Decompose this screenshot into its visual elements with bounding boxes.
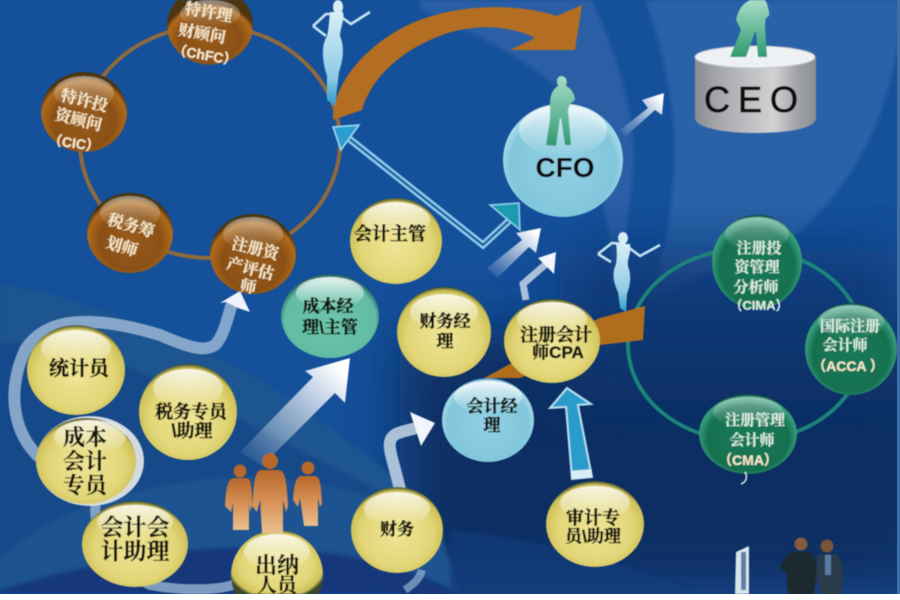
sphere: CIC: （CIC） — [47, 131, 101, 155]
sphere: ACCA: 会计师 — [822, 336, 868, 354]
sphere: tax planner — [87, 193, 173, 273]
sphere: cost manager: 理\主管 — [302, 317, 358, 337]
arrow: brown band through CPA to green circle — [482, 306, 645, 378]
sphere: CIMA: 资管理 — [734, 258, 780, 276]
sphere: accounting manager — [442, 378, 534, 462]
icon: CFO figure — [546, 76, 575, 146]
sphere: ChFC: 财顾问 — [177, 20, 227, 47]
sphere: ChFC: 特许理 — [183, 0, 234, 26]
sphere: tax planner: 税务筹 — [105, 210, 157, 241]
illustration: businessmen and tower — [735, 538, 843, 594]
sphere: finance clerk — [351, 487, 443, 573]
sphere: ACCA: （ACCA ） — [812, 358, 884, 374]
sphere: CFO — [503, 76, 623, 217]
arrow: large brown curved arrow to CEO track — [333, 5, 582, 120]
sphere: CMA: 注册管理 — [725, 411, 785, 429]
sphere: CIMA: 分析师 — [733, 278, 779, 296]
sphere: cost accountant: 成本 — [63, 425, 107, 450]
sphere: accounting assistant: 会计会 — [100, 514, 170, 540]
sphere: asset appraiser: 注册资 — [230, 234, 283, 264]
sphere: asset appraiser: 师 — [239, 277, 258, 297]
sphere: cost accountant: 会计 — [63, 449, 107, 474]
arrow: white bent arrow finance to accounting manager — [390, 412, 435, 590]
sphere: finance clerk: 财务 — [380, 519, 414, 539]
sphere: CIC: 特许投 — [59, 86, 110, 116]
sphere: ChFC: （ChFC） — [171, 41, 239, 69]
sphere: finance manager — [397, 287, 491, 377]
sphere: CMA: （CMA） — [718, 452, 778, 468]
sphere: cost manager: 成本经 — [302, 297, 354, 316]
sphere: CIMA: （CIMA） — [729, 298, 789, 313]
sphere: audit assistant: 员\助理 — [565, 527, 621, 546]
sphere: ACCA: 国际注册 — [820, 317, 880, 335]
sphere: finance manager: 理 — [436, 332, 454, 351]
sphere: tax specialist — [139, 364, 237, 460]
sphere: CPA: 注册会计 — [520, 324, 592, 345]
sphere: accounting manager: 会计经 — [466, 396, 518, 416]
sphere: accounting supervisor: 会计主管 — [354, 223, 426, 244]
sphere: audit assistant: 审计专 — [566, 507, 620, 528]
ring: green certification circle — [628, 249, 864, 441]
arrow: white bent arrow CPA to CFO — [523, 252, 556, 300]
arrow: curve behind accounting assistant — [95, 500, 240, 589]
sphere: accounting assistant — [82, 501, 188, 587]
sphere: tax specialist: 税务专员 — [155, 401, 230, 422]
ring: brown certification circle — [80, 26, 340, 258]
sphere: cashier: 出纳 — [255, 553, 299, 578]
sphere: accounting manager: 理 — [484, 416, 500, 435]
arrow: white curved arrow from cost accountant to appraiser — [14, 291, 250, 458]
icon: three people — [225, 453, 322, 533]
icon: female silhouette top — [313, 0, 370, 106]
sphere: CIC: 资顾问 — [53, 105, 104, 135]
sphere: asset appraiser — [210, 214, 296, 297]
arrow: white arrow CFO to CEO — [620, 93, 664, 137]
sphere: CMA — [699, 394, 797, 474]
sphere: tax planner: 划师 — [104, 233, 140, 260]
sphere: CIC — [41, 72, 127, 155]
sphere: ACCA — [805, 303, 897, 395]
arrow: white arrow to CFO — [487, 228, 541, 278]
icon: female silhouette lower — [598, 232, 660, 312]
icon: CEO figure — [730, 0, 769, 57]
sphere: finance manager: 财务经 — [420, 311, 471, 331]
sphere: audit assistant — [546, 481, 644, 567]
sphere: CMA: 会计师 — [729, 431, 775, 449]
sphere: asset appraiser: 产评估 — [225, 254, 276, 284]
podium: CEO cylinder — [695, 0, 816, 133]
sphere: accounting supervisor — [350, 198, 442, 284]
arrow: blue up arrow audit to CPA — [550, 388, 592, 479]
sphere: cost accountant — [36, 416, 144, 506]
sphere: cost manager — [281, 274, 379, 358]
sphere: cost accountant: 专员 — [63, 473, 110, 498]
arrow: blue double-line arrow to brown circle and CFO — [333, 125, 520, 245]
sphere: tax specialist: \助理 — [171, 421, 213, 441]
sphere: CPA — [504, 299, 600, 383]
sphere: CPA: 师CPA — [532, 343, 584, 362]
sphere: CFO: CFO — [535, 152, 595, 183]
bottom white strip — [0, 594, 900, 600]
sphere: CIMA — [712, 215, 802, 313]
sphere: statistician: 统计员 — [49, 357, 112, 380]
sphere: ChFC — [167, 0, 253, 69]
sphere: accounting assistant: 计助理 — [100, 538, 170, 564]
sphere: statistician — [27, 325, 125, 415]
podium: CEO cylinder: CEO — [704, 79, 806, 120]
sphere: cashier: 人员 — [257, 574, 300, 597]
sphere: CIMA: 注册投 — [736, 239, 782, 257]
sphere: cashier — [231, 530, 323, 597]
decorative mark below CMA — [741, 472, 746, 484]
arrow: large white arrow to cost manager — [240, 358, 350, 466]
